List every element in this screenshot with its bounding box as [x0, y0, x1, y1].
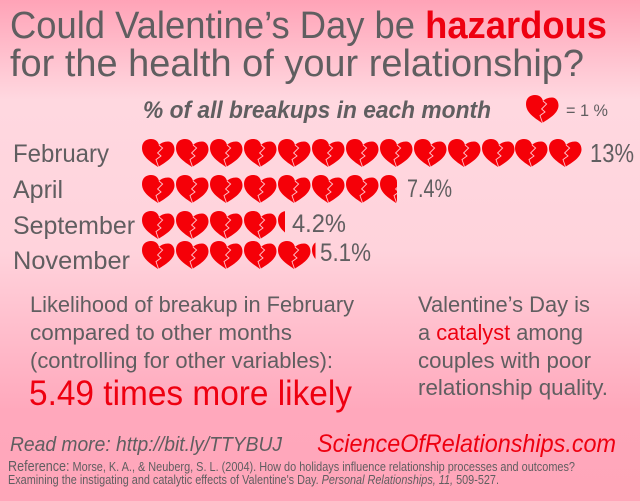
catalyst text block: couples with poor	[418, 348, 591, 373]
icon: broken heart legend	[526, 95, 558, 123]
pictogram row: February	[13, 138, 634, 168]
pictogram row: April: 7.4%	[407, 175, 452, 203]
pictogram row: February: February	[13, 140, 109, 168]
website name: ScienceOfRelationships.com	[317, 430, 616, 458]
pictogram row: November: 5.1%	[320, 239, 371, 267]
legend	[526, 95, 608, 123]
catalyst text block: Valentine’s Day is	[418, 292, 590, 317]
reference: Examining the instigating and catalytic effects of Valentine's Day. Personal Relationships, 11, 509-527.	[8, 472, 499, 487]
catalyst text block: relationship quality.	[418, 375, 608, 400]
pictogram row: September: September	[13, 212, 135, 240]
title	[10, 5, 607, 85]
catalyst text block: a catalyst among	[418, 320, 583, 345]
pictogram row: November	[15, 241, 370, 269]
pictogram row: September	[13, 210, 346, 240]
read more link: Read more: http://bit.ly/TTYBUJ	[10, 434, 283, 456]
title: for the health of your relationship?	[10, 43, 584, 85]
chart subtitle: % of all breakups in each month	[143, 97, 491, 124]
reference	[8, 458, 575, 487]
pictogram row: April	[13, 175, 452, 204]
likelihood text block: (controlling for other variables):	[30, 348, 333, 373]
title: Could Valentine’s Day be hazardous	[10, 5, 607, 47]
catalyst text block	[418, 292, 608, 400]
pictogram row: November: November	[13, 247, 130, 275]
likelihood text block	[29, 292, 354, 413]
callout: 5.49 times more likely: 5.49 times more likely	[29, 374, 352, 413]
likelihood text block: compared to other months	[30, 320, 292, 345]
pictogram row: April: April	[13, 176, 63, 204]
pictogram row: September: 4.2%	[292, 210, 346, 238]
likelihood text block: Likelihood of breakup in February	[30, 292, 354, 317]
legend label: = 1 %	[566, 101, 608, 120]
